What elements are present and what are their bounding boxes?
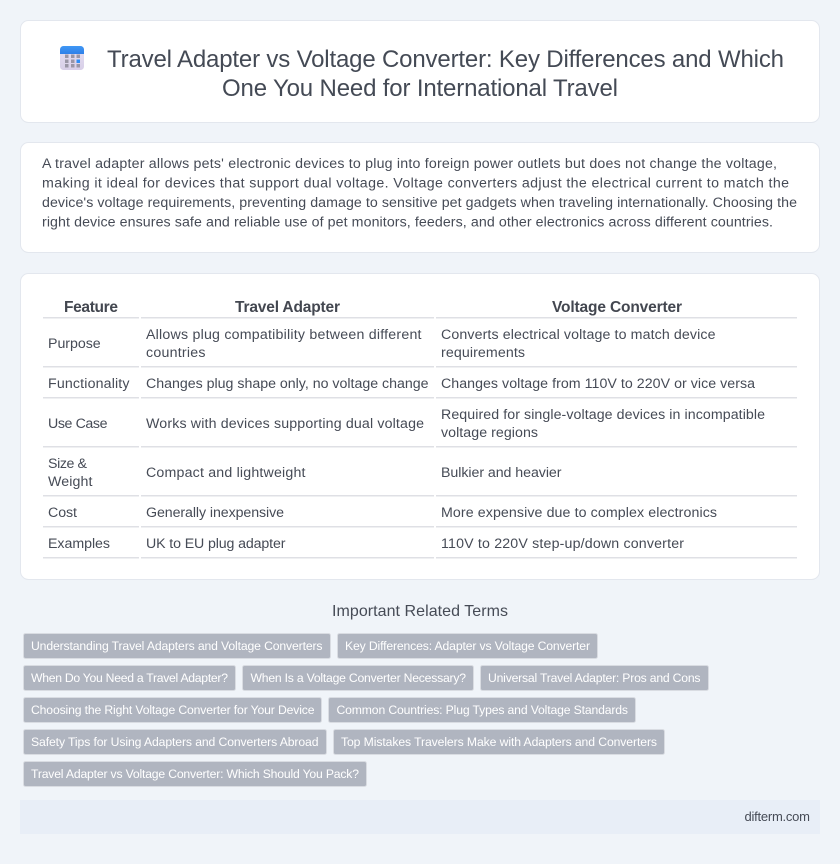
- table row: size and weight: Bulkier and heavier: [441, 465, 562, 481]
- table row: functionality: Functionality: [48, 376, 130, 392]
- chip: When Is a Voltage Converter Necessary?: [250, 671, 466, 685]
- chip: [338, 634, 598, 658]
- table header: Feature: [64, 299, 118, 316]
- table row: size and weight: [48, 456, 562, 490]
- table header: Travel Adapter: [235, 299, 340, 316]
- table row: purpose: Converts electrical voltage to match device: [441, 327, 716, 343]
- table row: use case: voltage regions: [441, 425, 538, 441]
- table row: purpose: Allows plug compatibility between different: [146, 327, 422, 343]
- table header: [64, 299, 682, 316]
- table row: cost: [48, 505, 717, 521]
- table row: purpose: countries: [146, 345, 206, 361]
- table row: use case: Works with devices supporting dual voltage: [146, 416, 424, 432]
- footer: [20, 800, 820, 834]
- heading: important related terms: Important Related Terms: [332, 603, 508, 620]
- chip: Top Mistakes Travelers Make with Adapters and Converters: [341, 735, 657, 749]
- chip: [242, 666, 474, 690]
- table row: examples: Examples: [48, 536, 110, 552]
- table row: size and weight: Compact and lightweight: [146, 465, 306, 481]
- chip: Universal Travel Adapter: Pros and Cons: [488, 671, 700, 685]
- table row: size and weight: Weight: [48, 474, 93, 490]
- table row: purpose: Purpose: [48, 336, 101, 352]
- text block: introduction: A travel adapter allows pets' electronic devices to plug into foreign power outlets but does not change the voltage,: [42, 156, 777, 172]
- title: One You Need for International Travel: [222, 75, 618, 102]
- panel: title header: [20, 20, 820, 122]
- text block: introduction: [42, 156, 797, 230]
- table row: examples: 110V to 220V step-up/down converter: [441, 536, 684, 552]
- table row: use case: Use Case: [48, 416, 108, 432]
- chip: When Do You Need a Travel Adapter?: [31, 671, 228, 685]
- panel: comparison table: [20, 274, 820, 580]
- table row: cost: Generally inexpensive: [146, 505, 284, 521]
- table row: size and weight: Size &: [48, 456, 88, 472]
- icon: calendar grid: [60, 46, 84, 70]
- table row: functionality: [48, 376, 755, 392]
- text block: introduction: device's voltage requirements, preventing damage to sensitive pet gadgets when traveling internationally. Choosing the: [42, 195, 797, 211]
- title: Travel Adapter vs Voltage Converter: Key Differences and Which: [107, 46, 784, 73]
- chip: [480, 666, 708, 690]
- chip: [24, 730, 326, 754]
- table header: Voltage Converter: [552, 299, 682, 316]
- chip: [24, 698, 322, 722]
- table row: use case: Required for single-voltage devices in incompatible: [441, 407, 765, 423]
- chip: Choosing the Right Voltage Converter for Your Device: [31, 703, 315, 717]
- chip: [24, 762, 366, 786]
- chip: [328, 698, 636, 722]
- panel: introduction paragraph: [20, 142, 820, 252]
- text block: introduction: right device ensures safe and reliable use of pet monitors, feeders, and other electronics across different countries.: [42, 214, 773, 230]
- chip: [24, 666, 236, 690]
- table row: functionality: Changes voltage from 110V to 220V or vice versa: [441, 376, 755, 392]
- table row: examples: UK to EU plug adapter: [146, 536, 286, 552]
- text block: introduction: making it ideal for devices that support dual voltage. Voltage converters adjust the electrical current to match the: [42, 176, 789, 192]
- table row: purpose: [48, 327, 716, 361]
- chip: [334, 730, 664, 754]
- table row: purpose: requirements: [441, 345, 525, 361]
- table row: cost: Cost: [48, 505, 77, 521]
- chip: Common Countries: Plug Types and Voltage Standards: [336, 703, 628, 717]
- footer: difterm.com: [744, 809, 810, 824]
- table row: examples: [48, 536, 684, 552]
- chip: [24, 634, 330, 658]
- table row: cost: More expensive due to complex electronics: [441, 505, 717, 521]
- table row: use case: [48, 407, 765, 441]
- chip: Safety Tips for Using Adapters and Converters Abroad: [31, 735, 318, 749]
- chip: Key Differences: Adapter vs Voltage Converter: [345, 639, 590, 653]
- chip: Understanding Travel Adapters and Voltage Converters: [31, 639, 322, 653]
- title: [107, 46, 784, 102]
- related terms chips: [24, 634, 708, 786]
- chip: Travel Adapter vs Voltage Converter: Which Should You Pack?: [31, 767, 359, 781]
- table row: functionality: Changes plug shape only, no voltage change: [146, 376, 429, 392]
